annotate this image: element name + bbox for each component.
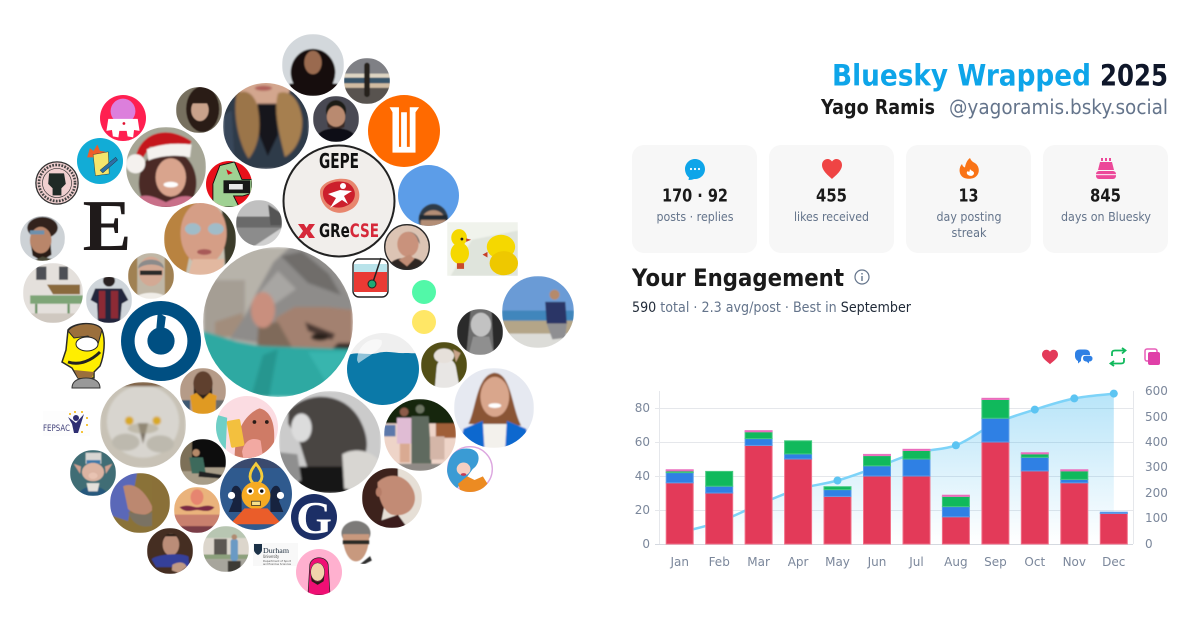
avatar: Tombi Pujol badge [35, 161, 79, 205]
avatar: Durham University logo: Department of Sport [263, 559, 292, 563]
avatar: black and white landscape [236, 200, 282, 246]
left axis labels: 60 [635, 435, 650, 449]
avatar: main profile photo [203, 247, 353, 397]
avatar: blonde woman with glasses [164, 203, 236, 275]
title: Bluesky Wrapped [832, 58, 1091, 92]
avatar: blue-haired anime character [447, 446, 493, 492]
bar: Jul [903, 449, 930, 544]
month labels: Dec [1102, 555, 1125, 569]
title year: 2025 [1100, 58, 1168, 92]
engagement summary: 590 total · 2.3 avg/post · Best in September [632, 300, 911, 316]
avatar: sleeping man [110, 473, 170, 533]
bar: Sep [982, 398, 1009, 544]
stat label: days on Bluesky [1061, 209, 1152, 224]
avatar: blue ring logo [121, 301, 201, 381]
right axis labels: 200 [1145, 486, 1168, 500]
avatar: FEPSAC logo [43, 411, 90, 436]
avatar: pink robot [100, 95, 146, 141]
bar: Jan [666, 470, 693, 544]
avatar: grey-haired man with glasses [128, 253, 174, 299]
avatar: Durham University logo [253, 543, 298, 566]
month labels [669, 555, 1125, 569]
avatar: orange W logo [368, 95, 440, 167]
avatar: pig chef [70, 450, 116, 496]
left axis labels: 0 [642, 537, 650, 551]
chart grid lines [655, 391, 1134, 544]
icon: birthday cake [1096, 158, 1116, 179]
avatar: woman with dark curly hair [282, 34, 344, 96]
right axis labels: 300 [1145, 460, 1168, 474]
right axis labels: 0 [1145, 537, 1153, 551]
avatar: man sitting on stage [180, 439, 226, 485]
avatar: GEPE GReCSE logo: GReCSE [319, 220, 379, 242]
avatar: fluffy owl [100, 382, 186, 468]
month labels: Aug [944, 555, 968, 569]
avatar: two yellow ducks [447, 222, 518, 276]
avatar: Durham University logo: Durham [263, 546, 289, 555]
month labels: Nov [1063, 555, 1086, 569]
month labels: Apr [788, 555, 809, 569]
avatar: Guardian G logo: G [296, 492, 332, 543]
stat value: 455 [816, 186, 847, 206]
avatar: GEPE GReCSE logo: GEPE [319, 149, 359, 173]
avatar bubble cluster [20, 34, 574, 595]
right axis labels [1145, 384, 1168, 551]
avatar: harpsichord in a room [23, 263, 83, 323]
icon: likes legend heart [1042, 350, 1058, 364]
avatar: blue water glass ball [347, 333, 419, 405]
avatar: bearded man with curly hair [20, 216, 65, 261]
bar: Nov [1061, 470, 1088, 544]
avatar: man in orange hoodie [180, 368, 226, 414]
bar: Aug [942, 495, 969, 544]
avatar: man on a coastal terrace [502, 276, 574, 348]
avatar: woman in profile [362, 468, 422, 528]
month labels: Jul [908, 555, 924, 569]
avatar: woman with bangs [176, 87, 222, 133]
cumulative line [680, 394, 1114, 533]
right axis labels: 100 [1145, 511, 1168, 525]
avatar: El Español E logo [67, 185, 147, 267]
bar: Apr [785, 441, 812, 544]
panel: posts and replies [632, 145, 757, 253]
stat label: day posting [936, 209, 1002, 224]
bar: May [824, 487, 851, 544]
cumulative line points [834, 390, 1118, 484]
avatar: smiling woman in blue blazer [454, 368, 534, 448]
avatar: El Español E logo: E [83, 185, 131, 266]
month labels: May [825, 555, 850, 569]
avatar: Durham University logo: and Exercise Sciences [263, 562, 291, 566]
icon: flame [960, 158, 979, 179]
avatar: person in a football shirt [86, 277, 132, 323]
panel: day posting streak [906, 145, 1031, 253]
avatar: figure on a beach [344, 58, 390, 104]
avatar: woman in black and white [279, 391, 381, 493]
bar: Jun [864, 454, 890, 544]
stat label: posts · replies [656, 209, 734, 224]
left axis labels: 20 [635, 503, 650, 517]
avatar: pink hooded character [296, 549, 342, 595]
bar: Oct [1021, 453, 1048, 544]
decorative yellow dot [412, 310, 436, 334]
avatar: otter with phone [216, 396, 278, 458]
avatar: green pixel dinosaur [206, 161, 252, 207]
avatar: thoughtful bald man [384, 224, 430, 270]
user handle: @yagoramis.bsky.social [949, 95, 1168, 119]
avatar: woman beside a bronze statue [384, 399, 456, 471]
right axis labels: 500 [1145, 410, 1168, 424]
stat value: 845 [1090, 186, 1121, 206]
icon: heart [822, 159, 842, 179]
heading: Your Engagement: Your Engagement [631, 264, 844, 292]
avatar: red drink glass [352, 258, 389, 298]
avatar: Durham University logo: University [263, 554, 279, 559]
avatar: GEPE GReCSE logo [284, 146, 394, 256]
user display name: Yago Ramis [820, 95, 935, 119]
right axis labels: 600 [1145, 384, 1168, 398]
month labels: Oct [1024, 555, 1045, 569]
avatar: woman in a Santa hat [126, 127, 206, 207]
avatar: man at a sofa [147, 528, 193, 574]
avatar: FEPSAC logo: FEPSAC [43, 424, 70, 434]
icon: reposts legend arrows [1110, 348, 1126, 366]
avatar: orange illustrated character [220, 458, 292, 530]
stat value: 170 · 92 [662, 186, 728, 206]
month labels: Feb [709, 555, 730, 569]
left axis labels: 80 [635, 401, 650, 415]
stat value: 13 [958, 186, 978, 206]
month labels: Mar [747, 555, 770, 569]
bar: Dec [1100, 512, 1127, 544]
icon: chat bubble [685, 159, 705, 180]
avatar: white cat [421, 342, 467, 388]
month labels: Jun [867, 555, 886, 569]
avatar: black and white portrait [457, 309, 503, 355]
avatar: mustache close-up [174, 487, 220, 533]
bar: Mar [745, 431, 772, 544]
icon: replies legend chat [1075, 350, 1092, 364]
stat label: likes received [794, 209, 869, 224]
stacked bars [666, 398, 1127, 544]
month labels: Jan [669, 555, 689, 569]
icon: info [855, 270, 869, 284]
left axis labels: 40 [635, 469, 650, 483]
combined chart: monthly engagement bars and cumulative line [635, 384, 1168, 569]
legend icons [1042, 348, 1160, 366]
left axis labels [635, 401, 650, 551]
avatar: notepad and pencil on blue [77, 138, 123, 184]
stat label second line: streak [952, 225, 987, 240]
decorative green dot [412, 280, 436, 304]
avatar: man in front of a building [203, 526, 249, 572]
avatar: yellow cartoon portrait [61, 322, 105, 388]
panel: days on Bluesky [1043, 145, 1168, 253]
right axis labels: 400 [1145, 435, 1168, 449]
cumulative area [680, 394, 1114, 544]
icon: quotes legend squares [1145, 349, 1160, 365]
avatar: man in black shirt [313, 96, 359, 142]
month labels: Sep [984, 555, 1007, 569]
panel: likes received [769, 145, 894, 253]
avatar: woman with long hair and dark jacket [223, 83, 309, 169]
bar: Feb [706, 471, 733, 544]
avatar: grey-haired man cutout [340, 520, 372, 564]
avatar: man peeking in against blue [398, 165, 459, 226]
